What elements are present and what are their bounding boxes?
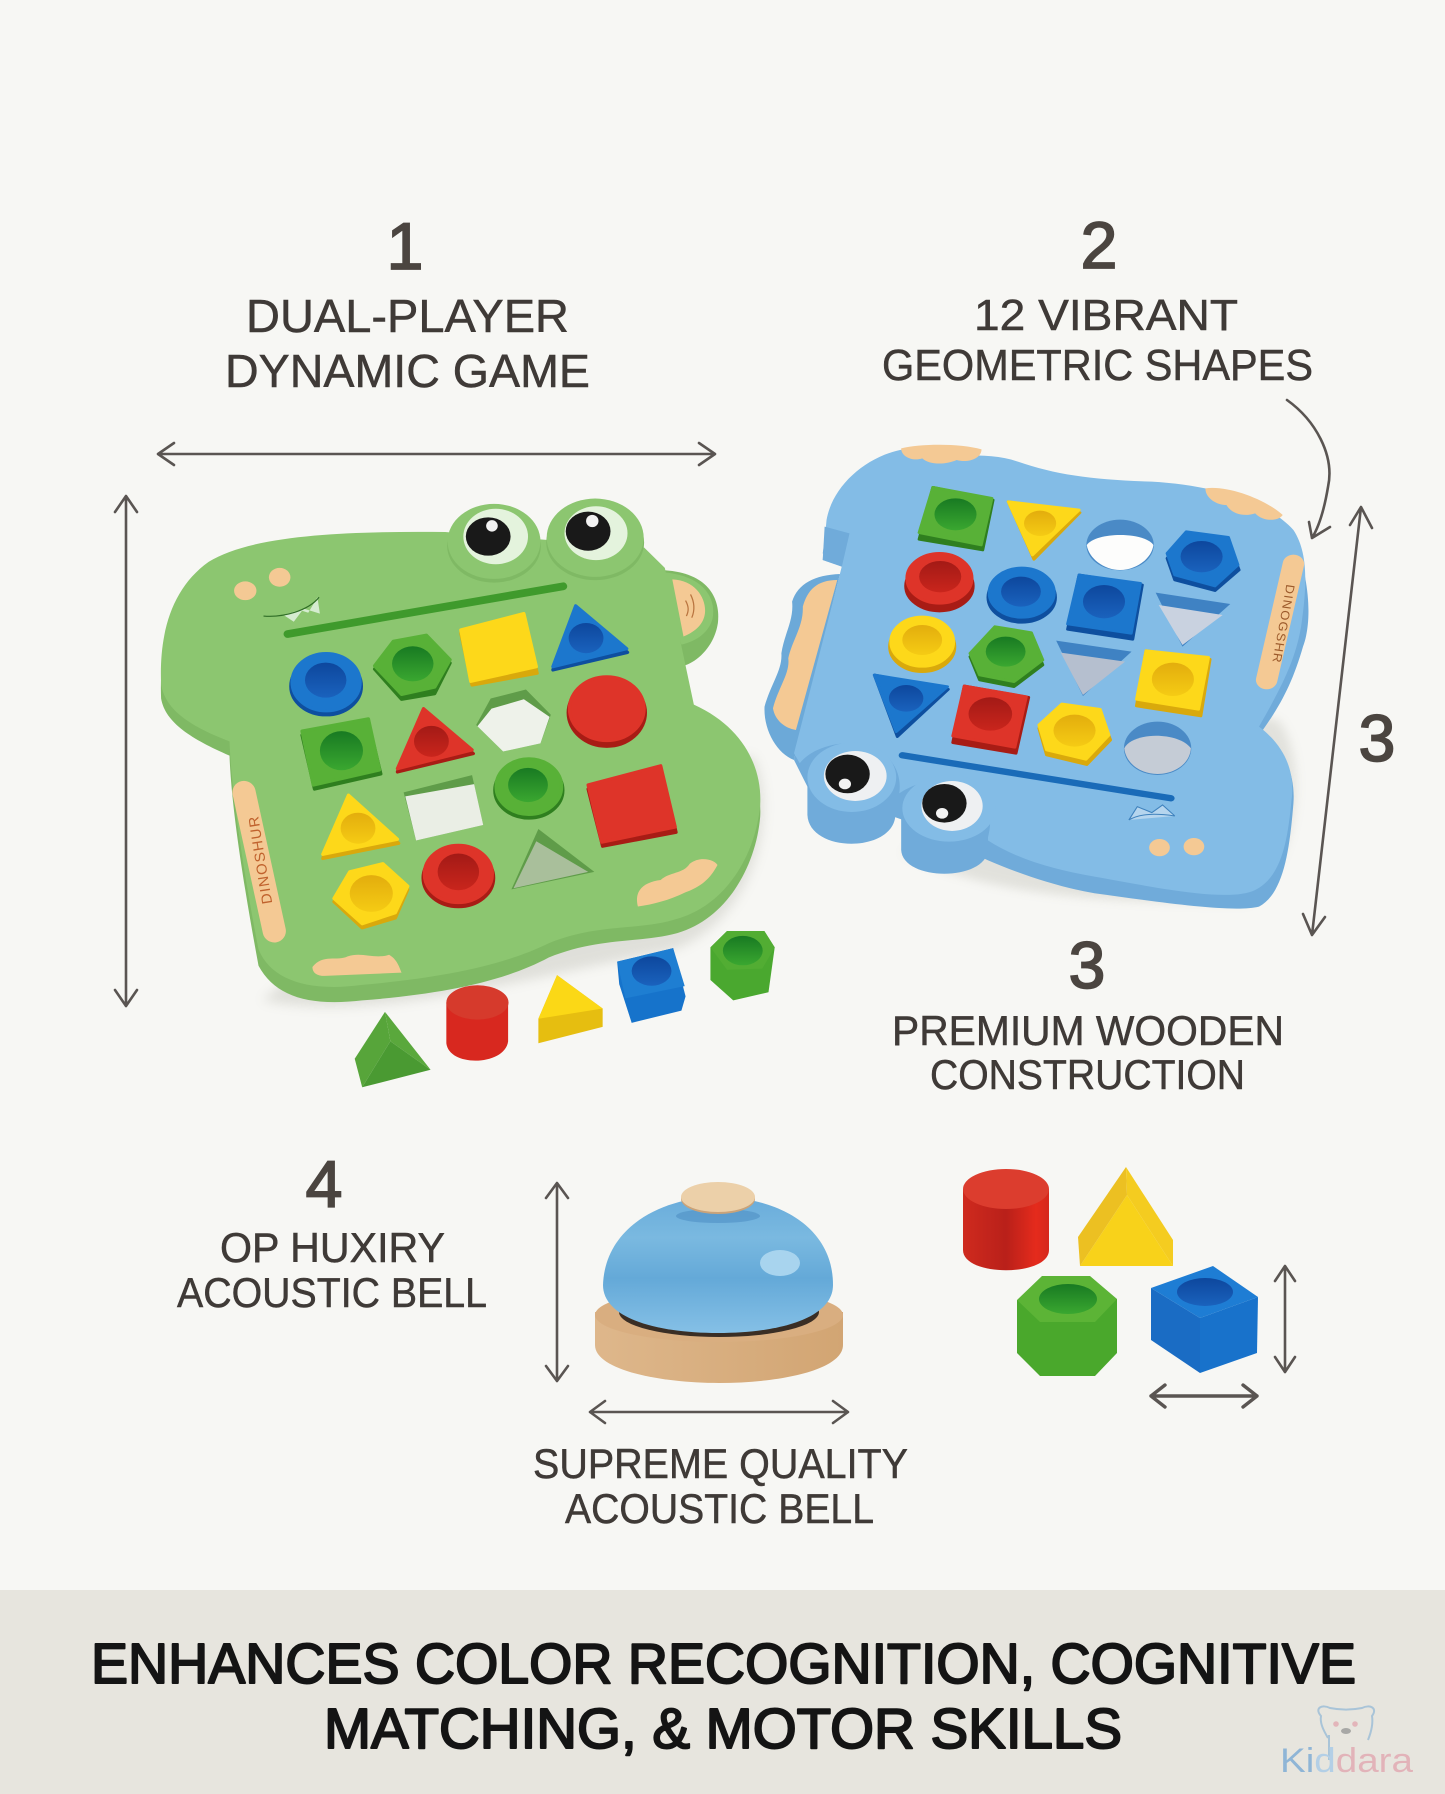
footer headline: MATCHING, & MOTOR SKILLS [324,1697,1122,1761]
piece: yellow hexagon [334,864,408,928]
eye left [807,743,896,844]
cutout: square [404,775,483,840]
logo: Kiddara bear [1280,1706,1413,1780]
arrow: bell width [590,1401,848,1423]
teeth [1129,805,1175,820]
cutout: hexagon [476,690,551,752]
cutout: triangle [511,829,594,889]
piece: blue ring [291,654,361,715]
name plate [244,792,276,931]
bell knob [676,1182,760,1223]
eye left [447,504,541,583]
tan scallop right [1205,488,1283,520]
piece: red triangle [397,709,473,772]
heading: feature 3: CONSTRUCTION [930,1051,1245,1098]
arrow: height of green board [115,496,137,1006]
loose piece: green prism [355,1012,431,1087]
block: blue cube [1151,1266,1258,1373]
piece: red ring [423,845,494,907]
illustration: acoustic bell [595,1182,843,1383]
piece: blue ring [988,568,1055,622]
heading: feature 4: ACOUSTIC BELL [177,1269,487,1316]
loose piece: yellow wedge [538,975,603,1043]
cutout: white circle [1086,520,1154,570]
caption: supreme quality: SUPREME QUALITY [533,1440,908,1487]
heading: feature 2: 12 VIBRANT [974,291,1238,340]
cutout: triangle upper [1156,593,1230,647]
nostrils [1149,838,1204,856]
board side wall [794,457,1308,909]
tail scallop tan [773,580,837,730]
piece: yellow square [1137,651,1210,716]
board side wall [161,541,760,1002]
piece: green hexagon [970,627,1043,687]
dome highlight [760,1250,800,1276]
loose piece: red cylinder [446,985,509,1061]
footer band [0,1590,1445,1794]
nostrils [234,568,290,600]
piece: blue hexagon [1167,532,1239,591]
arrow: bell height [546,1183,568,1381]
heading: feature 1: DUAL-PLAYER [246,290,569,342]
piece: yellow triangle [323,795,399,858]
name plate [1267,564,1296,680]
block: red cylinder [963,1169,1049,1270]
eye right [546,499,644,580]
tan scallop right [637,859,717,907]
block: green hexagon [1017,1276,1117,1376]
bear head [1318,1706,1374,1740]
piece: red ring [906,553,973,611]
caption: supreme quality [533,1440,908,1532]
bear face [1329,1721,1358,1760]
piece: red disc [568,677,645,746]
arrow: width of green board [158,443,715,465]
heading: feature 4 [177,1147,487,1316]
arrow: curved pointer to blue board [1287,400,1330,538]
heading: feature 4: 4 [306,1147,342,1221]
mouth slot [902,755,1171,798]
piece: red square [953,686,1029,753]
name plate: DINOSHUR [246,814,276,905]
piece: red square [588,766,676,846]
heading: feature 3: PREMIUM WOODEN [892,1007,1284,1054]
piece: green hexagon [375,635,450,699]
piece: green square [919,487,993,550]
ear [657,570,718,666]
notch shadow [823,527,850,567]
heading: feature 3 [892,928,1284,1098]
caption: supreme quality: ACOUSTIC BELL [565,1485,874,1532]
cutout: gray circle [1124,722,1191,775]
heading: feature 2: 2 [1081,208,1117,282]
mouth slot [288,586,563,634]
heading: feature 2 [882,208,1313,390]
piece: yellow triangle [1008,502,1080,559]
name plate: DINOGSHR [1269,584,1296,664]
eye right [901,775,996,874]
arrow: block height [1275,1266,1295,1372]
wordmark: Kiddara [1280,1742,1413,1780]
piece: blue triangle [553,606,628,670]
piece: yellow hexagon [1039,704,1111,765]
piece: green ring [495,759,563,818]
illustration: four wooden blocks [963,1167,1258,1376]
bell dome [603,1197,833,1333]
heading: feature 2: GEOMETRIC SHAPES [882,341,1313,390]
tail scallop side [764,574,840,760]
panel: green dinosaur board [161,499,775,1087]
piece: blue square [1068,575,1142,639]
heading: feature 1: DYNAMIC GAME [225,345,590,397]
loose piece: green hexagonal prism [710,931,775,1000]
smile and teeth [264,597,320,622]
cutout: triangle lower [1056,641,1132,696]
footer headline: ENHANCES COLOR RECOGNITION, COGNITIVE [91,1632,1356,1696]
footer headline [91,1632,1356,1761]
board top surface [161,532,760,987]
heading: feature 4: OP HUXIRY [220,1224,445,1271]
panel: blue dinosaur board [764,445,1308,909]
block: yellow pyramid [1078,1167,1173,1266]
piece: yellow ring [890,617,955,672]
heading: feature 3: 3 [1069,928,1105,1002]
bell base [595,1312,843,1383]
heading: feature 1: 1 [387,209,423,283]
arrow: height of blue board [1303,507,1372,935]
piece: yellow square [461,614,537,685]
tan scallop top [901,445,982,464]
loose piece: blue cube [617,948,686,1023]
arrow: block width [1151,1385,1257,1407]
heading: feature 1 [225,209,590,397]
piece: blue triangle [874,675,948,737]
number: side dimension 3: 3 [1359,701,1395,775]
tan scallop bottom [312,955,402,976]
board top surface [794,449,1305,895]
piece: green square [302,719,381,789]
